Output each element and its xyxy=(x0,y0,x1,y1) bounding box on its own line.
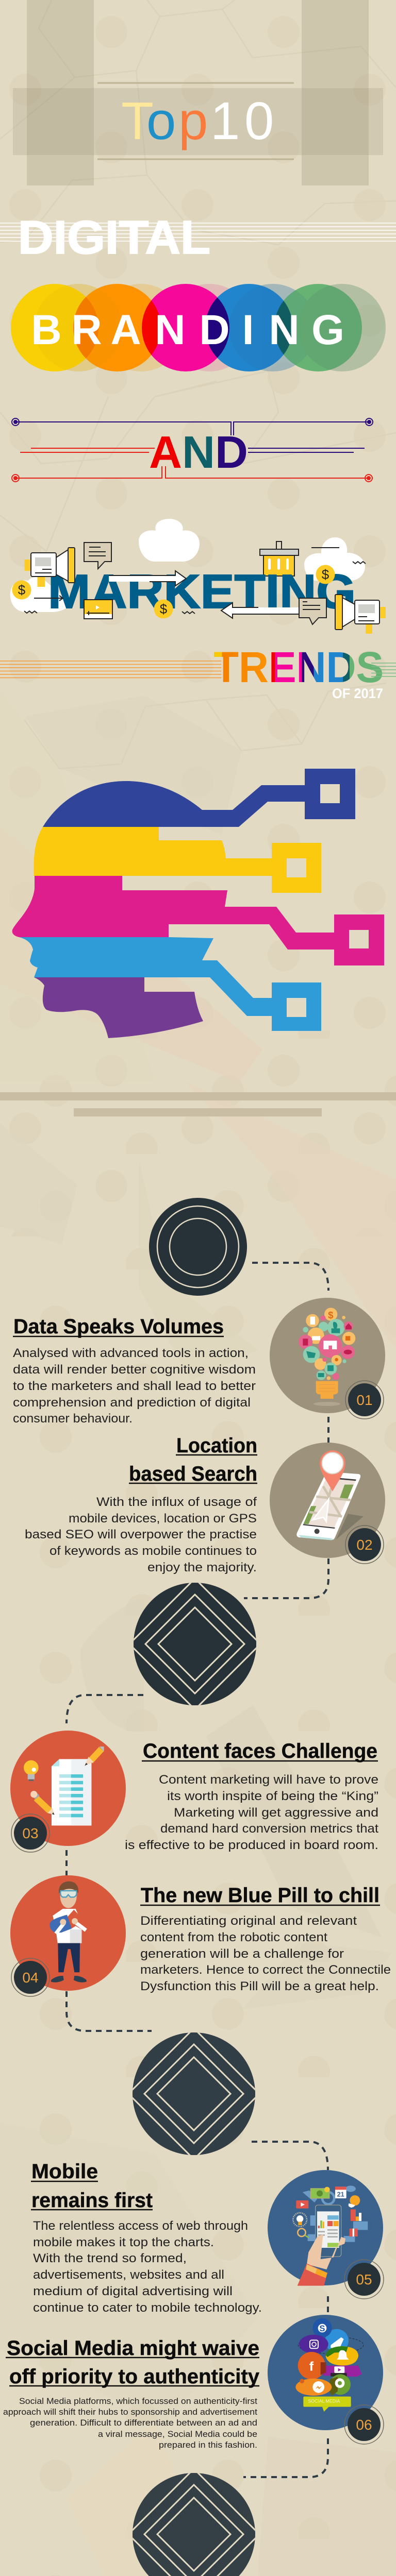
text block: Marketing will get aggressive and xyxy=(174,1806,378,1820)
icon: 06 social media bubbles xyxy=(268,2315,383,2430)
text block: continue to cater to mobile technology. xyxy=(33,2301,262,2315)
icon: 01 lightbulb of marketing bubbles: $ xyxy=(328,1310,334,1320)
icon: 01 lightbulb of marketing bubbles xyxy=(270,1298,385,1413)
text block: Analysed with advanced tools in action, xyxy=(13,1346,249,1360)
text block: generation will be a challenge for xyxy=(140,1947,344,1961)
heading: MARKETING with icon strip xyxy=(10,519,386,634)
text block: With the influx of usage of xyxy=(96,1495,257,1509)
icon: 02 phone with map pin xyxy=(270,1443,385,1558)
connector: 03 to 04 xyxy=(65,1850,68,1875)
subheading: of 2017: OF 2017 xyxy=(332,686,383,701)
icon: coins xyxy=(12,565,335,618)
icon: 05 hand holding phone xyxy=(268,2170,383,2286)
title band: Top 10: 0 xyxy=(244,91,274,150)
text block: enjoy the majority. xyxy=(147,1561,257,1574)
text block: Dysfunction this Pill will be a great help. xyxy=(140,1979,379,1993)
panel: Mobile remains first xyxy=(31,2160,262,2315)
heading: DIGITAL: DIGITAL xyxy=(18,212,210,264)
text block: a viral message, Social Media could be xyxy=(98,2430,257,2439)
MARKETING word: MARKETING xyxy=(48,565,356,618)
text block: Content marketing will have to prove xyxy=(159,1773,378,1787)
heading: Data Speaks Volumes xyxy=(13,1315,224,1338)
text block xyxy=(125,1773,378,1852)
connector: 05 to 06 xyxy=(327,2296,329,2315)
icon: 03 document with pencils xyxy=(10,1731,126,1846)
badge 04: 04 xyxy=(22,1970,39,1986)
badge 03 xyxy=(11,1814,50,1852)
illustration: striped head with circuit connectors xyxy=(12,769,384,1038)
title band: Top 10: o xyxy=(146,91,176,150)
connector: 04 to diamond xyxy=(67,1991,152,2031)
text block: mobile devices, location or GPS xyxy=(69,1512,257,1526)
text block: based SEO will overpower the practise xyxy=(25,1528,257,1541)
heading: BRANDING on overlapping circles: I xyxy=(242,307,254,353)
icon: 05 hand holding phone: 21 xyxy=(337,2191,344,2198)
icon: 06 social media bubbles: f xyxy=(309,2360,314,2374)
text block xyxy=(3,2397,257,2450)
node: diamond circle 3 xyxy=(128,2469,259,2576)
connector: 01 to 02 xyxy=(327,1417,329,1443)
heading: Mobile xyxy=(31,2160,98,2183)
heading: off priority to authenticity xyxy=(9,2365,260,2388)
icon: coins: $ xyxy=(18,582,26,598)
heading xyxy=(129,1434,257,1485)
badge 06 xyxy=(344,2405,384,2444)
heading: BRANDING on overlapping circles: R xyxy=(71,307,102,353)
badge 03: 03 xyxy=(22,1825,39,1841)
text block: of keywords as mobile continues to xyxy=(50,1544,257,1558)
node: diamond circle 2 xyxy=(133,2032,255,2155)
icon: 06 social media bubbles: SOCIAL MEDIA xyxy=(308,2398,340,2403)
text block: Differentiating original and relevant xyxy=(140,1914,357,1928)
text block: advertisements, websites and all xyxy=(33,2268,224,2282)
heading: TRENDS xyxy=(0,643,396,701)
heading: AND with connector lines xyxy=(12,418,373,482)
heading: Location xyxy=(176,1434,257,1457)
icon: squiggles xyxy=(24,562,366,614)
badge 02 xyxy=(345,1526,384,1564)
text block: The relentless access of web through xyxy=(33,2219,248,2233)
text block: prepared in this fashion. xyxy=(159,2441,257,2450)
icon: right arrow xyxy=(109,571,186,586)
heading: based Search xyxy=(129,1463,257,1485)
title band: Top 10: 1 xyxy=(210,91,240,150)
icon: coins: $ xyxy=(322,567,329,582)
icon: 06 social media bubbles: S xyxy=(319,2324,325,2333)
badge 01 xyxy=(345,1381,384,1419)
text block xyxy=(25,1495,257,1574)
text block: marketers. Hence to correct the Connectile xyxy=(140,1963,391,1977)
heading: The new Blue Pill to chill xyxy=(141,1884,380,1907)
connector: diamond to 03 xyxy=(67,1695,143,1723)
text block xyxy=(13,1346,256,1426)
heading: BRANDING on overlapping circles: D xyxy=(199,307,230,353)
text block: comprehension and prediction of digital xyxy=(13,1396,251,1410)
icon: left megaphone xyxy=(25,548,75,587)
heading: BRANDING on overlapping circles: G xyxy=(311,307,344,353)
icon: clouds xyxy=(10,519,365,612)
text block xyxy=(33,2219,262,2315)
icon: left arrow xyxy=(221,603,299,618)
connector: 02 to diamond xyxy=(244,1558,328,1598)
connector: dashed path to 01 xyxy=(252,1263,328,1291)
text block: With the trend so formed, xyxy=(33,2251,187,2265)
text block: medium of digital advertising will xyxy=(33,2284,233,2298)
heading: BRANDING on overlapping circles: N xyxy=(155,307,186,353)
text block: content from the robotic content xyxy=(140,1930,327,1944)
badge 04 xyxy=(11,1958,50,1996)
text block: consumer behaviour. xyxy=(13,1412,133,1426)
text block: demand hard conversion metrics that xyxy=(160,1822,378,1836)
panel: Content faces Challenge xyxy=(125,1740,378,1852)
badge 06: 06 xyxy=(356,2417,372,2433)
badge 05 xyxy=(344,2260,384,2299)
connector: 06 to diamond xyxy=(243,2438,328,2477)
icon: thin arrow xyxy=(34,596,63,601)
title band: Top 10: T xyxy=(121,91,154,150)
heading: remains first xyxy=(31,2189,153,2212)
text block: data will render better cognitive wisdom xyxy=(13,1363,256,1377)
text block: Social Media platforms, which focussed on authenticity-first xyxy=(19,2397,257,2406)
badge 01: 01 xyxy=(356,1392,373,1408)
title band: Top 10: p xyxy=(178,91,208,150)
node: start circle xyxy=(149,1198,247,1296)
icon: coins: $ xyxy=(160,601,168,617)
text block: is effective to be produced in board room. xyxy=(125,1838,378,1852)
badge 02: 02 xyxy=(356,1537,373,1553)
heading xyxy=(6,2337,260,2388)
heading: BRANDING on overlapping circles: A xyxy=(110,307,141,353)
heading: BRANDING on overlapping circles xyxy=(11,284,386,371)
text block xyxy=(140,1914,391,1993)
title band: Top 10 xyxy=(13,0,383,185)
text block: approach will shift their hubs to sponsorship and advertisement xyxy=(3,2408,257,2417)
icon: left speech bubble xyxy=(84,543,111,569)
heading: BRANDING on overlapping circles: N xyxy=(269,307,300,353)
heading: TRENDS: TRENDS xyxy=(213,643,384,691)
panel: Location based Search xyxy=(25,1434,257,1574)
icon: video player xyxy=(84,600,112,619)
panel: Social Media might waive off priority to authenticity xyxy=(3,2337,260,2450)
icon: right megaphone xyxy=(335,595,386,634)
panel: The new Blue Pill to chill xyxy=(140,1884,391,1993)
icon: 04 man holding blue pill xyxy=(10,1875,126,1991)
heading: Social Media might waive xyxy=(7,2337,259,2360)
badge 05: 05 xyxy=(356,2272,372,2287)
icon: right speech bubble xyxy=(299,598,326,624)
heading: BRANDING on overlapping circles: B xyxy=(31,307,62,353)
connector: diamond to 05 xyxy=(252,2142,328,2170)
divider bars xyxy=(0,1092,396,1116)
node: diamond circle 1 xyxy=(134,1583,256,1705)
icon: building xyxy=(260,541,339,576)
heading xyxy=(31,2160,153,2212)
text block: mobile makes it top the charts. xyxy=(33,2235,214,2249)
heading: AND with connector lines: AND xyxy=(149,427,248,478)
text block: to the marketers and shall lead to better xyxy=(13,1379,256,1393)
panel: Data Speaks Volumes xyxy=(13,1315,256,1426)
text block: its worth inspite of being the “King” xyxy=(167,1789,378,1803)
heading: Content faces Challenge xyxy=(143,1740,377,1762)
text block: generation. Difficult to differentiate between an ad and xyxy=(30,2418,257,2428)
